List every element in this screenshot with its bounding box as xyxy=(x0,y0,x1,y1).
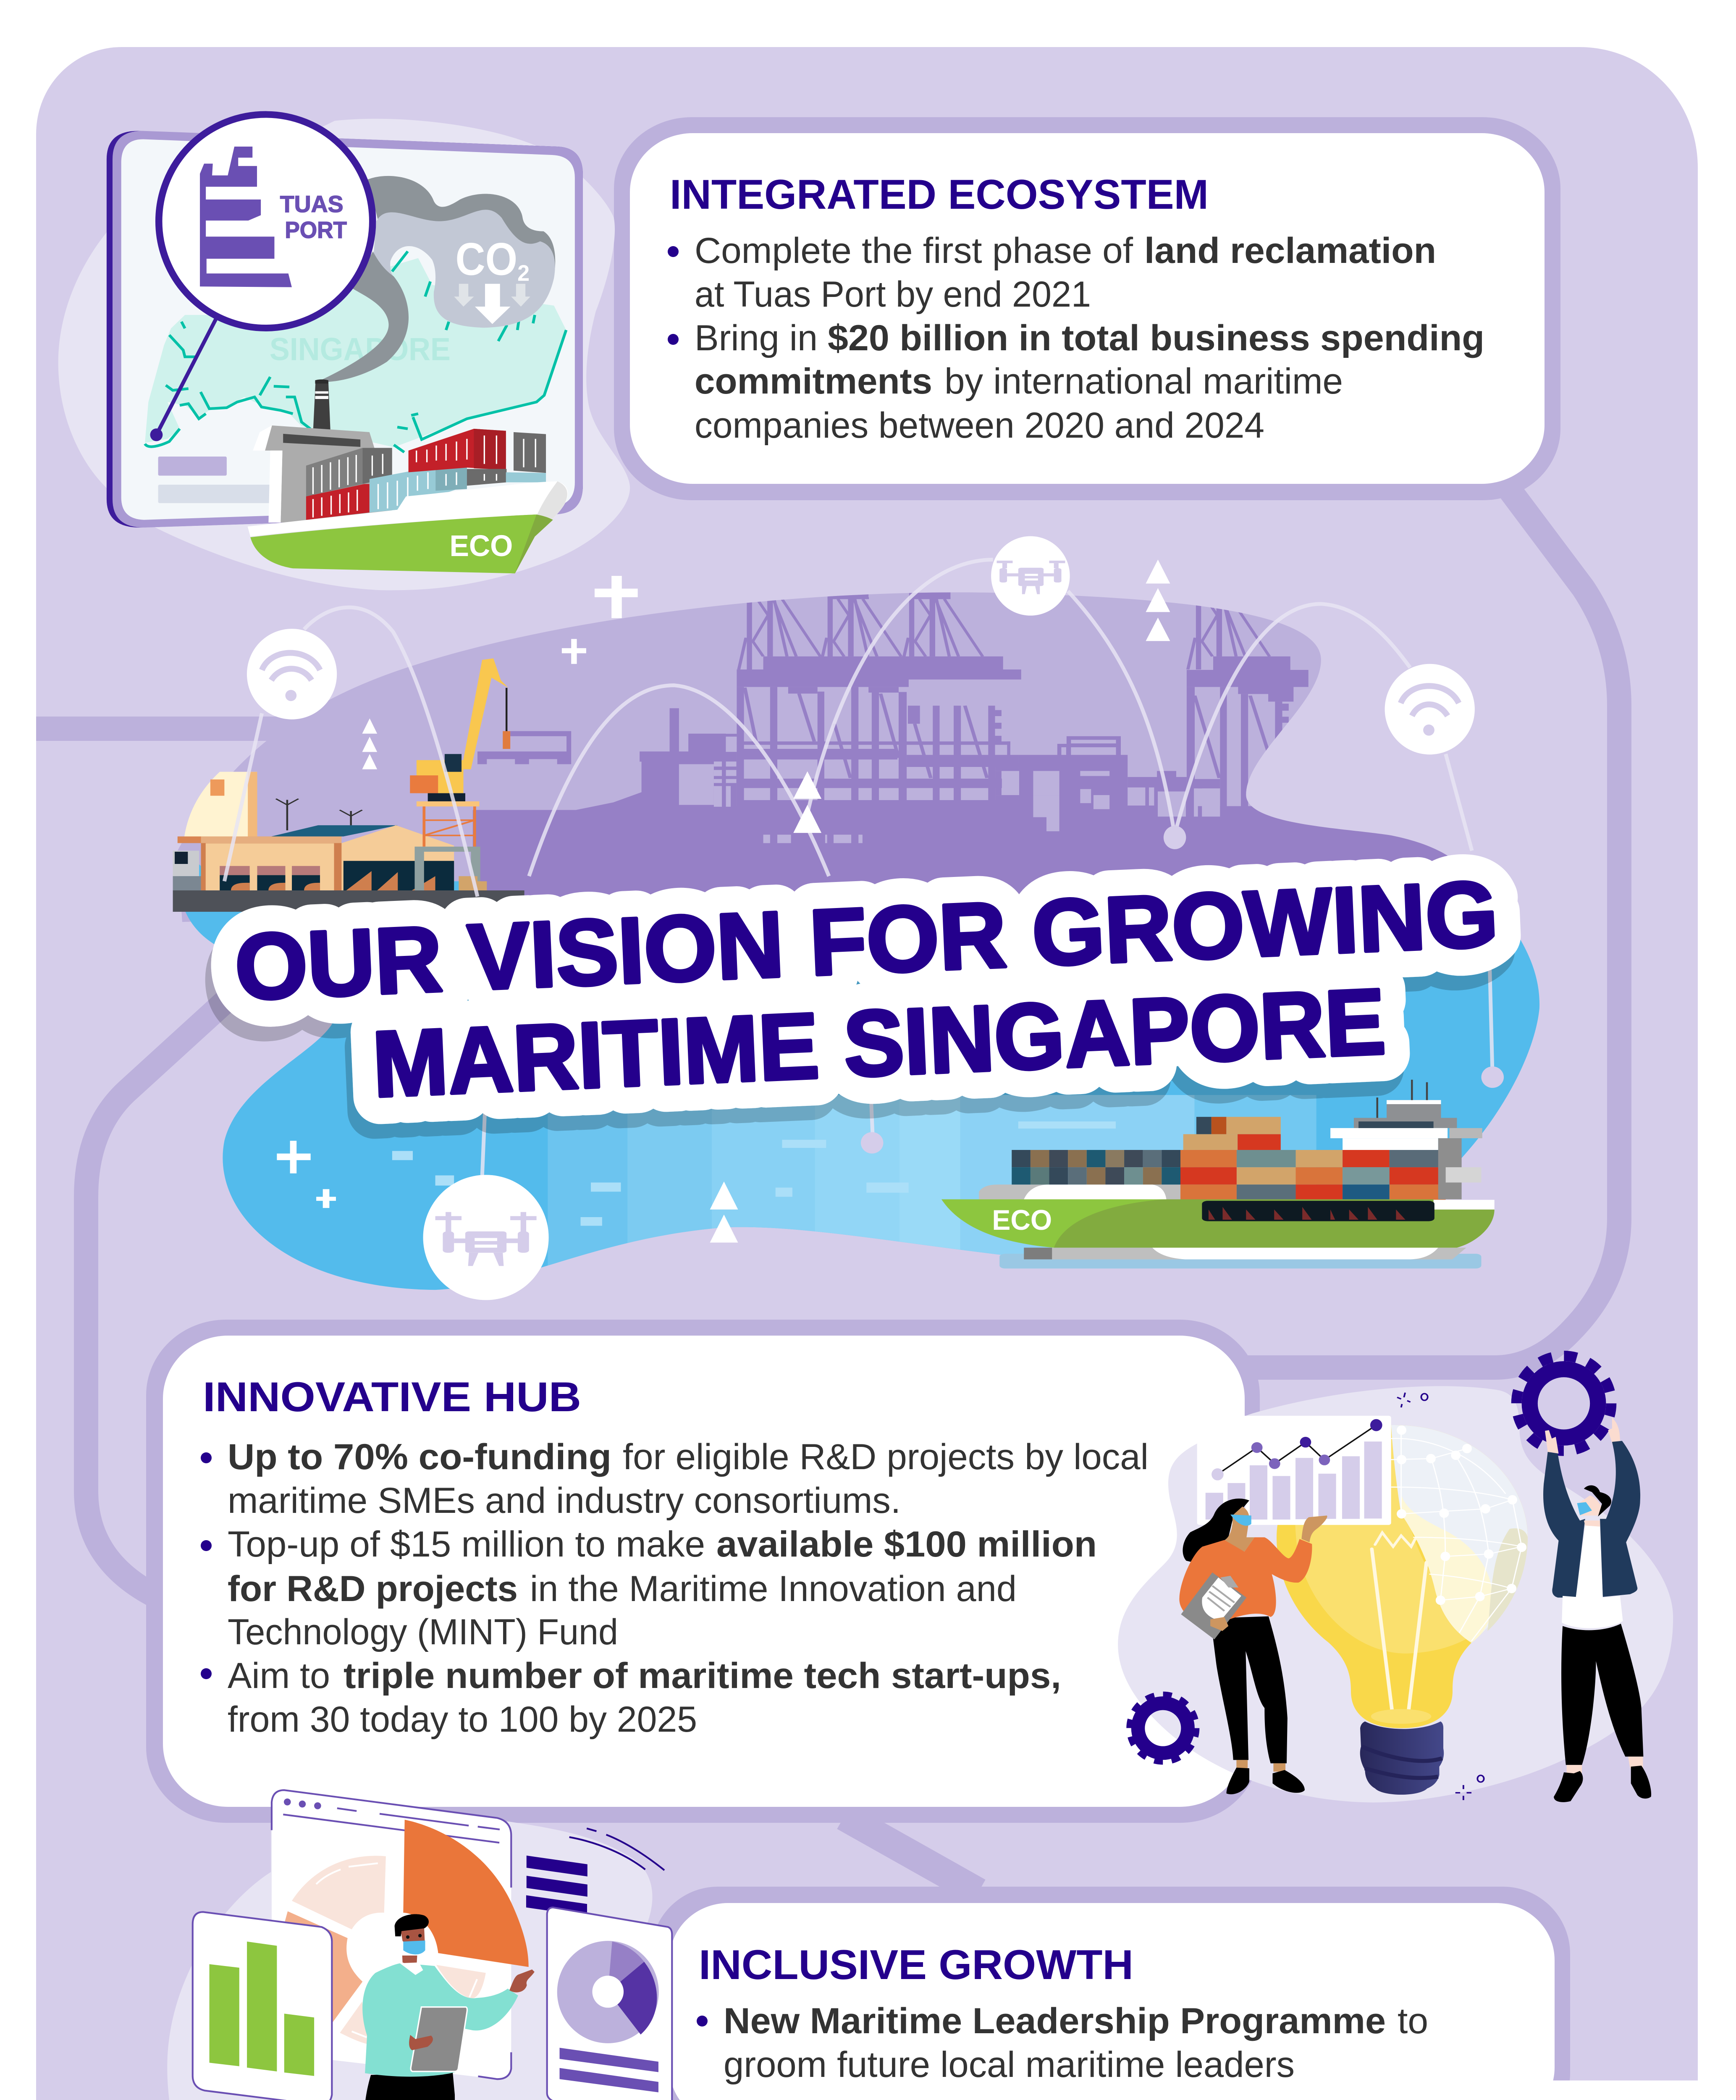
bar chart card xyxy=(193,1912,332,2100)
background shape: water blob xyxy=(179,850,1539,1290)
connector pathways xyxy=(36,487,1619,1892)
person: woman with clipboard xyxy=(1179,1499,1327,1794)
icon: magnifier with Tuas Port outline: PORT xyxy=(285,217,347,243)
panel: inclusive growth card xyxy=(651,1887,1570,2100)
person: man lifting gear xyxy=(1516,1356,1651,1802)
illustration: hero scene with port, drones and ship xyxy=(173,536,1539,1300)
water light stripes xyxy=(548,1095,1316,1299)
text block: integrated ecosystem bullets: $20 billion in total business spending xyxy=(828,318,1484,358)
icon: large gear xyxy=(1516,1356,1611,1451)
triangles and plus signs xyxy=(277,559,1170,1242)
text block: inclusive growth bullet: New Maritime Leadership Programme xyxy=(724,2001,1386,2041)
heading: innovative hub: INNOVATIVE HUB xyxy=(203,1373,581,1420)
decorative lines xyxy=(182,1828,664,2100)
title sticker backing: MARITIME SINGAPORE xyxy=(370,969,1387,1117)
decorative list bars xyxy=(526,1856,587,1916)
text block: innovative hub bullets: Aim to xyxy=(228,1656,330,1696)
background blob xyxy=(1118,1386,1673,1803)
icon: drone bottom xyxy=(423,1175,549,1300)
text block: integrated ecosystem bullets: Complete the first phase of xyxy=(695,231,1133,271)
text block: innovative hub bullets: maritime SMEs and industry consortiums. xyxy=(228,1480,901,1521)
illustration: innovation bulb with two people xyxy=(1118,1356,1673,1803)
icon: small gear xyxy=(1129,1694,1197,1762)
icon: wifi right xyxy=(1385,664,1475,754)
icon: smoke cloud with CO2 xyxy=(321,176,555,382)
text block: integrated ecosystem bullets: commitments xyxy=(695,361,932,402)
label: Singapore on map: SINGAPORE xyxy=(270,331,451,367)
port skyline silhouette xyxy=(473,591,1505,922)
heading: inclusive growth: INCLUSIVE GROWTH xyxy=(699,1941,1133,1988)
text block: integrated ecosystem bullets: by international maritime xyxy=(944,361,1343,402)
illustration: data analyst with dashboards xyxy=(167,1790,672,2100)
title sticker backing xyxy=(233,862,1500,1117)
text block: integrated ecosystem bullets: at Tuas Port by end 2021 xyxy=(695,274,1091,315)
person: analyst with tablet xyxy=(348,1913,535,2100)
icon: smoke cloud with CO2: CO xyxy=(456,233,517,285)
text block: innovative hub bullets xyxy=(201,1437,1149,1740)
text block: innovative hub bullets: from 30 today to 100 by 2025 xyxy=(228,1699,697,1740)
icon: magnifier with Tuas Port outline xyxy=(150,115,372,441)
water dashes xyxy=(392,1121,1116,1226)
text block: integrated ecosystem bullets: Bring in xyxy=(695,318,818,358)
title sticker backing: OUR VISION FOR GROWING xyxy=(233,862,1500,1020)
icon: eco cargo ship xyxy=(248,379,568,573)
text block: innovative hub bullets: Technology (MINT) Fund xyxy=(228,1612,618,1652)
icon: container ship with eco hull: ECO xyxy=(992,1204,1052,1236)
panel: innovative hub card xyxy=(146,1320,1260,1823)
text block: innovative hub bullets: for eligible R&D projects by local xyxy=(623,1437,1149,1477)
donut chart card xyxy=(547,1908,672,2100)
icon: drone top xyxy=(991,536,1070,616)
text block: innovative hub bullets: Top-up of $15 million to make xyxy=(228,1524,705,1564)
icon: port buildings with yellow crane xyxy=(173,658,524,912)
icon: eco cargo ship: ECO xyxy=(449,529,513,562)
icon: light bulb with globe xyxy=(1277,1425,1528,1795)
text block: innovative hub bullets: for R&D projects xyxy=(228,1569,518,1609)
text block: innovative hub bullets: Up to 70% co-funding xyxy=(228,1437,611,1477)
arc end nodes xyxy=(861,826,1504,1153)
sparkle marks xyxy=(1397,1393,1484,1800)
network arcs xyxy=(224,559,1492,1176)
text block: innovative hub bullets: available $100 million xyxy=(716,1524,1097,1564)
text block: integrated ecosystem bullets xyxy=(668,231,1484,446)
icon: smoke cloud with CO2: 2 xyxy=(517,260,530,286)
panel: integrated ecosystem card xyxy=(614,117,1560,500)
chart panel xyxy=(1197,1416,1391,1525)
illustration: Tuas Port map with eco ship xyxy=(58,115,630,590)
heading: integrated ecosystem: INTEGRATED ECOSYSTEM xyxy=(670,171,1209,218)
title: OUR VISION FOR GROWING xyxy=(233,862,1500,1020)
title xyxy=(233,862,1500,1117)
background blob xyxy=(167,1820,656,2100)
text block: innovative hub bullets: triple number of maritime tech start-ups, xyxy=(344,1656,1061,1696)
text block: inclusive growth bullet: groom future local maritime leaders xyxy=(724,2045,1295,2085)
background shape: sky blob xyxy=(178,592,1476,922)
icon: wifi left xyxy=(247,629,337,719)
text block: inclusive growth bullet: to xyxy=(1398,2001,1428,2041)
icon: container ship with eco hull xyxy=(941,1080,1495,1268)
text block: innovative hub bullets: in the Maritime Innovation and xyxy=(530,1569,1017,1609)
text block: integrated ecosystem bullets: land reclamation xyxy=(1144,231,1436,271)
text block: inclusive growth bullet xyxy=(697,2001,1428,2085)
icon: magnifier with Tuas Port outline: TUAS xyxy=(280,191,344,218)
browser panel with pie chart xyxy=(272,1790,529,2079)
title: MARITIME SINGAPORE xyxy=(370,969,1387,1117)
text block: integrated ecosystem bullets: companies between 2020 and 2024 xyxy=(695,405,1264,446)
